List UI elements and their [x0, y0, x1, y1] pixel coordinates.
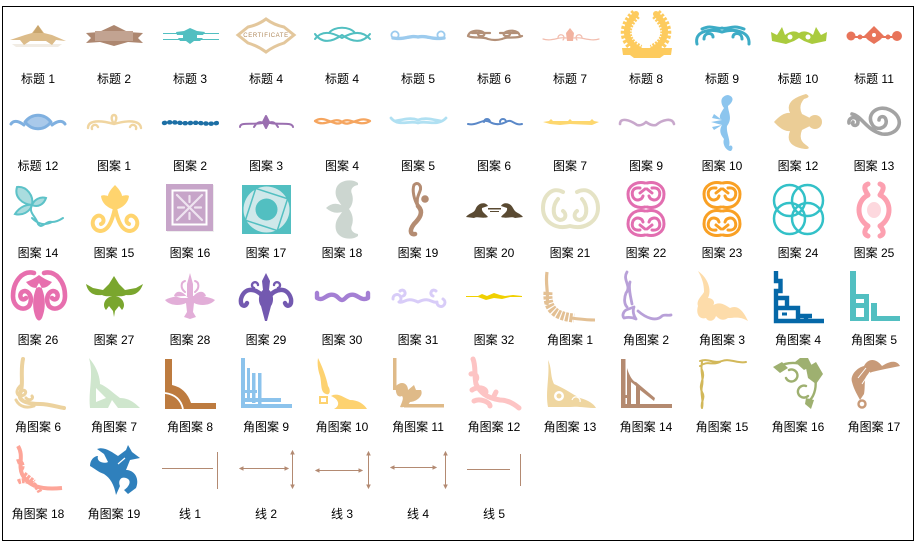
- label: 线 5: 线 5: [483, 507, 505, 521]
- label: 标题 12: 标题 12: [18, 159, 59, 173]
- label: 图案 16: 图案 16: [170, 245, 211, 260]
- label: 角图案 8: 角图案 8: [167, 419, 213, 434]
- label: 角图案 11: 角图案 11: [392, 419, 444, 434]
- icon: 图案 23: [704, 183, 740, 235]
- icon: 标题 9: [697, 27, 749, 44]
- label: 线 4: 线 4: [407, 507, 429, 521]
- icon: 线 1: [162, 452, 218, 489]
- icon: 角图案 6: [16, 359, 64, 408]
- label: 标题 3: 标题 3: [173, 72, 207, 86]
- icon: 标题 3: [163, 28, 219, 44]
- label: 角图案 6: 角图案 6: [15, 419, 61, 434]
- icon: 角图案 14: [621, 359, 672, 408]
- icon: 图案 21: [543, 190, 598, 227]
- label: 图案 7: 图案 7: [553, 158, 587, 173]
- label: 角图案 15: 角图案 15: [696, 419, 749, 434]
- icon: 角图案 11: [393, 358, 444, 408]
- icon: 角图案 12: [471, 359, 519, 408]
- icon: 角图案 18: [17, 446, 62, 492]
- icon: 图案 18: [326, 180, 358, 239]
- label: 角图案 3: 角图案 3: [699, 332, 745, 347]
- label: 图案 10: 图案 10: [702, 158, 743, 173]
- label: 角图案 19: 角图案 19: [88, 506, 141, 521]
- label: 图案 12: 图案 12: [778, 158, 819, 173]
- label: 标题 2: 标题 2: [97, 72, 131, 86]
- label: 线 2: 线 2: [255, 507, 277, 521]
- label: 角图案 17: 角图案 17: [848, 419, 901, 434]
- icon: 图案 16: [166, 184, 214, 232]
- icon: 角图案 1: [546, 272, 595, 320]
- label: 角图案 1: 角图案 1: [547, 332, 593, 347]
- icon: 图案 6: [468, 119, 522, 124]
- label: 图案 1: 图案 1: [97, 158, 131, 173]
- label: 图案 23: 图案 23: [702, 245, 743, 260]
- icon: 图案 22: [628, 183, 664, 235]
- icon: 角图案 13: [547, 360, 596, 408]
- label: 图案 13: 图案 13: [854, 158, 895, 173]
- icon: 图案 31: [393, 290, 445, 306]
- icon: 角图案 2: [623, 272, 671, 319]
- icon: 角图案 10: [318, 358, 367, 409]
- icon: 线 2: [240, 451, 294, 488]
- label: 角图案 7: 角图案 7: [91, 419, 137, 434]
- icon: 图案 5: [391, 118, 446, 123]
- label: 角图案 2: 角图案 2: [623, 332, 669, 347]
- icon: 线 5: [467, 454, 520, 486]
- icon: 角图案 4: [776, 271, 824, 321]
- icon: 角图案 9: [241, 358, 292, 408]
- icon: 图案 29: [241, 273, 291, 321]
- label: 标题 10: 标题 10: [778, 72, 819, 86]
- icon: 角图案 7: [89, 358, 140, 408]
- label: 标题 8: 标题 8: [629, 72, 663, 86]
- label: 标题 5: 标题 5: [401, 72, 435, 86]
- label: 图案 30: 图案 30: [322, 332, 363, 347]
- icon: 标题 12: [11, 115, 65, 129]
- icon: 角图案 16: [773, 358, 823, 409]
- label: 图案 21: 图案 21: [550, 245, 591, 260]
- label: 图案 18: 图案 18: [322, 245, 363, 260]
- icon: 线 4: [391, 452, 447, 488]
- icon: 图案 2: [164, 122, 217, 124]
- icon: 图案 7: [543, 119, 599, 125]
- label: 标题 6: 标题 6: [477, 72, 511, 86]
- label: 图案 2: 图案 2: [173, 158, 207, 173]
- icon: 图案 15: [93, 185, 137, 231]
- icon: 图案 17: [242, 185, 291, 234]
- label: 图案 15: 图案 15: [94, 245, 135, 260]
- label: 图案 19: 图案 19: [398, 245, 439, 260]
- label: 角图案 4: 角图案 4: [775, 332, 821, 347]
- label: 角图案 9: 角图案 9: [243, 419, 289, 434]
- icon: 标题 4 teal: [315, 28, 370, 41]
- label: 图案 5: 图案 5: [401, 158, 435, 173]
- label: 角图案 12: 角图案 12: [468, 419, 521, 434]
- icon: 标题 7: [543, 28, 599, 41]
- label: 图案 24: 图案 24: [778, 245, 819, 260]
- icon: 图案 12: [774, 94, 822, 149]
- icon: 标题 2: [86, 25, 143, 46]
- label: 图案 6: 图案 6: [477, 158, 511, 173]
- label: 角图案 16: 角图案 16: [772, 419, 825, 434]
- label: 角图案 10: 角图案 10: [316, 419, 369, 434]
- label: 标题 9: 标题 9: [705, 72, 739, 86]
- label: 图案 27: 图案 27: [94, 332, 135, 347]
- icon: 图案 24: [774, 185, 823, 234]
- icon: 标题 6: [468, 31, 522, 40]
- icon: 标题 11: [846, 26, 902, 44]
- icon: 图案 25: [859, 184, 889, 236]
- icon: 角图案 15: [700, 360, 746, 408]
- icon: 图案 32: [466, 293, 522, 300]
- icon: 角图案 8: [165, 359, 216, 409]
- label: 图案 4: 图案 4: [325, 158, 359, 173]
- icon: 图案 13: [849, 108, 899, 134]
- icon: 标题 4: [238, 19, 294, 52]
- icon: 角图案 19: [90, 445, 140, 495]
- label: 图案 14: 图案 14: [18, 245, 59, 260]
- icon: 图案 19: [411, 184, 429, 234]
- label: 角图案 5: 角图案 5: [851, 332, 897, 347]
- label: 标题 7: 标题 7: [553, 72, 587, 86]
- icon: 图案 30: [317, 293, 368, 300]
- label: 图案 31: 图案 31: [398, 332, 439, 347]
- label: 图案 22: 图案 22: [626, 245, 667, 260]
- icon: 图案 10: [711, 95, 733, 151]
- icon: 图案 26: [13, 273, 65, 320]
- label: 角图案 18: 角图案 18: [12, 506, 65, 521]
- icon: 线 3: [316, 452, 370, 488]
- icon: 图案 28: [165, 273, 215, 319]
- label: 标题 1: 标题 1: [21, 72, 55, 86]
- icon: 标题 1: [10, 25, 66, 47]
- icon: 图案 20: [466, 203, 523, 218]
- icon: 图案 1: [88, 115, 141, 129]
- label: 标题 4: 标题 4: [249, 72, 283, 86]
- icon: 角图案 17: [852, 360, 900, 408]
- icon: 标题 8 wreath: [622, 14, 672, 58]
- label: 图案 9: 图案 9: [629, 158, 663, 173]
- icon: 图案 3: [240, 116, 293, 128]
- icon: 标题 5: [391, 31, 445, 39]
- label: 角图案 14: 角图案 14: [620, 419, 673, 434]
- icon: 标题 4: CERTIFICATE: [243, 33, 289, 39]
- label: 线 1: 线 1: [179, 507, 201, 521]
- label: 图案 25: 图案 25: [854, 245, 895, 260]
- label: 图案 20: 图案 20: [474, 245, 515, 260]
- icon: 图案 27: [86, 276, 143, 317]
- icon: 标题 10: [771, 27, 827, 44]
- icon: 角图案 5: [850, 271, 900, 321]
- label: 图案 3: 图案 3: [249, 158, 283, 173]
- label: 角图案 13: 角图案 13: [544, 419, 597, 434]
- label: 图案 26: 图案 26: [18, 332, 59, 347]
- icon: 角图案 3: [697, 271, 748, 321]
- label: 标题 11: 标题 11: [854, 72, 894, 86]
- label: 图案 28: 图案 28: [170, 332, 211, 347]
- label: 图案 17: 图案 17: [246, 245, 287, 260]
- label: 图案 29: 图案 29: [246, 332, 287, 347]
- icon: 图案 9: [620, 120, 674, 125]
- icon: 图案 14: [15, 187, 63, 226]
- label: 线 3: 线 3: [331, 507, 353, 521]
- label: 图案 32: 图案 32: [474, 332, 515, 347]
- icon: 图案 4: [315, 119, 370, 124]
- label: 标题 4: 标题 4: [325, 72, 359, 86]
